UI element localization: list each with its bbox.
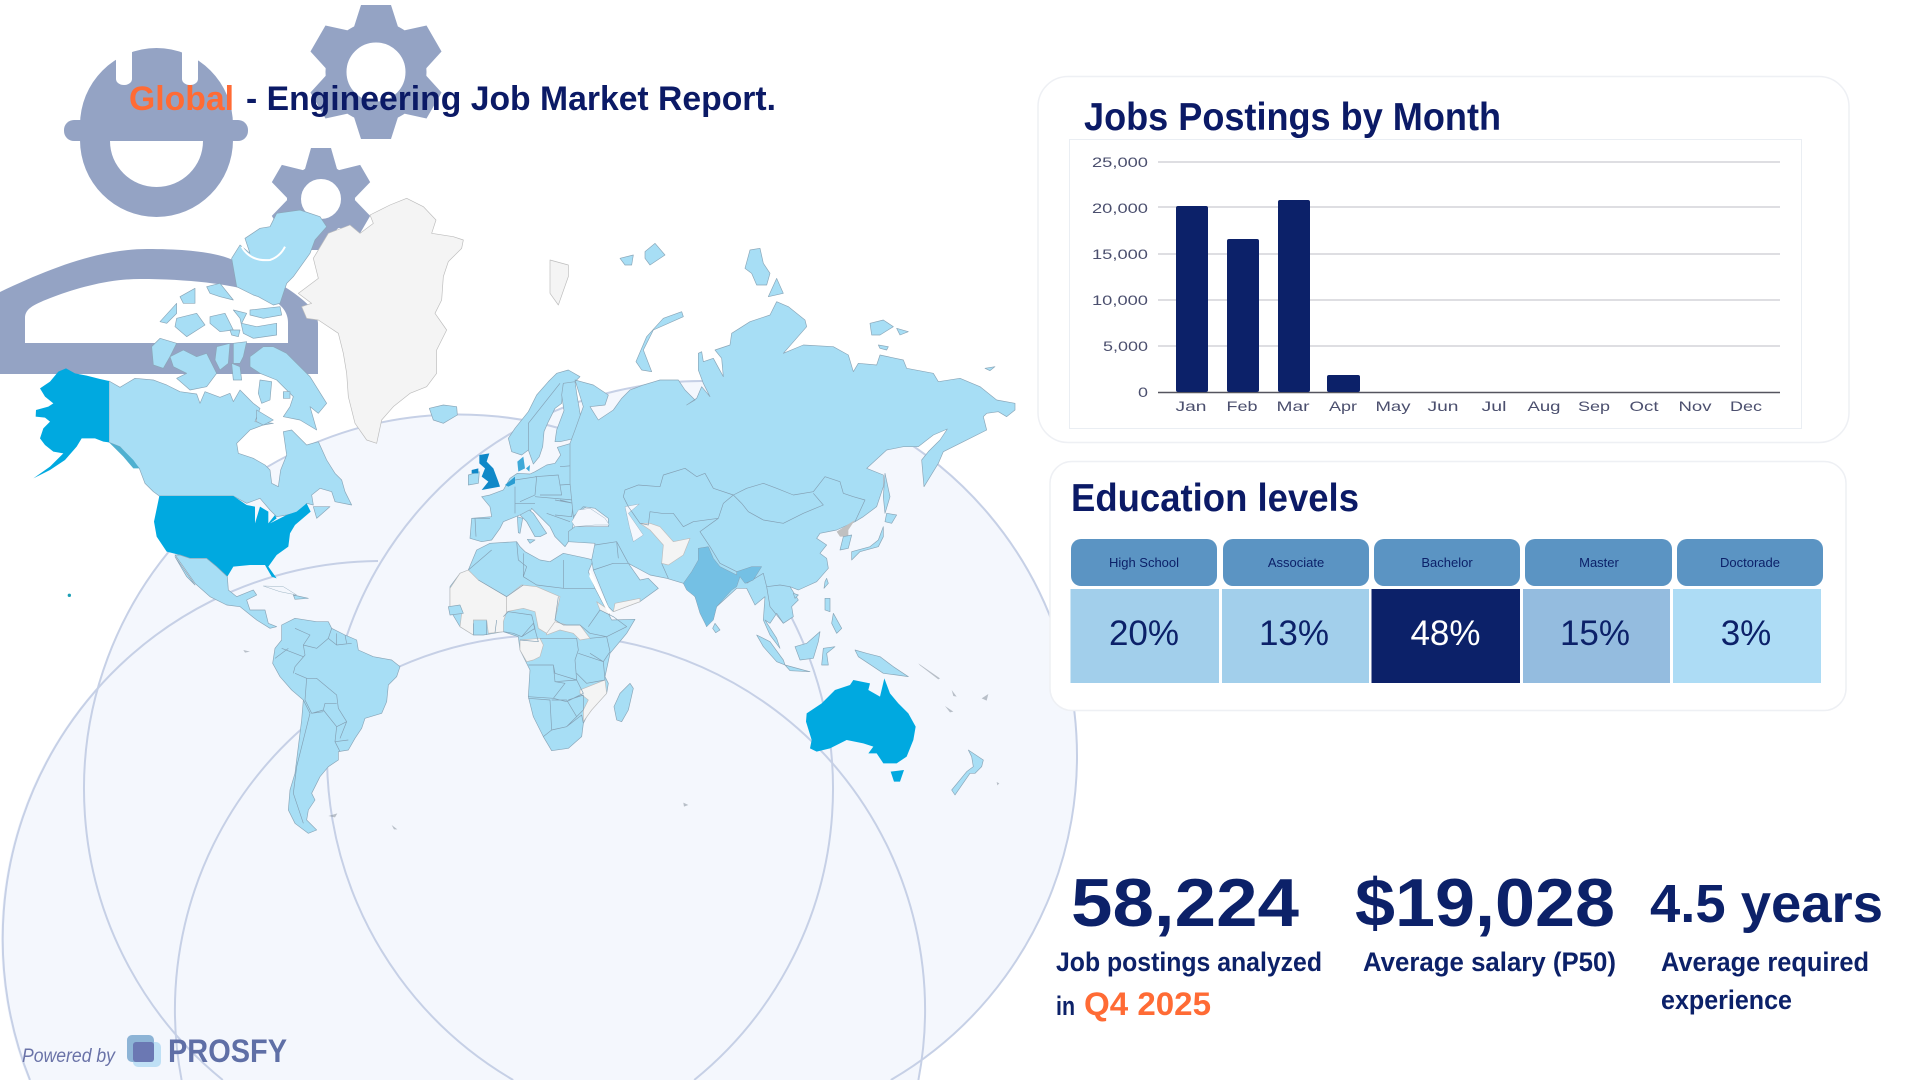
Finland [555,382,582,442]
table headers: Master [1579,555,1620,570]
stat: average required experience: experience [1661,985,1792,1015]
United States [154,496,311,578]
Nansen Sound [242,247,285,260]
Italy [520,510,547,537]
Africa countries without data [450,570,610,722]
Caspian Sea [625,504,643,542]
table headers: Doctorade [1720,555,1780,570]
Hawaii [68,594,71,597]
map: Oceania [806,663,999,795]
Cuba [263,586,297,595]
Greenland [298,198,463,443]
bar chart: Mar [1276,398,1310,414]
stat: average salary: $19,028 [1355,865,1615,941]
Senegal [448,605,463,615]
bar chart: Apr [1329,398,1357,414]
table headers [1071,539,1823,586]
logo mark [127,1035,161,1067]
main title [129,80,776,118]
Denmark [517,457,530,472]
table values [1070,589,1821,683]
India [683,547,762,627]
Yemen [613,598,640,612]
Madagascar [614,683,633,722]
bar chart: Oct [1630,398,1659,414]
stat: average salary [1355,865,1616,977]
bar chart: Aug [1528,398,1560,414]
stat: job postings analyzed: Job postings analyzed [1056,947,1322,977]
panel: jobs postings by month [1038,76,1849,442]
table values: 3% [1721,614,1771,653]
Russia and Asia landmass [568,302,1015,648]
Italy islands [517,517,535,543]
map: Africa and Europe [448,370,635,751]
bar chart: 5,000 [1103,338,1148,354]
map: North America [33,198,463,628]
table headers: Bachelor [1421,555,1473,570]
Falklands and small islands [243,650,688,829]
bar chart: Nov [1678,398,1712,414]
panel: education levels [1050,462,1846,710]
Canadian arctic islands [152,210,457,518]
powered by Prosfy logo: Powered by [22,1046,116,1067]
table values: 20% [1109,614,1179,653]
panel heading: Jobs Postings by Month [1084,96,1501,139]
panel heading: Education levels [1071,477,1359,520]
stat: job postings analyzed: Q4 2025 [1084,986,1211,1022]
Mexico and Central America [175,555,277,628]
Tasmania [891,770,904,782]
United Kingdom [472,453,500,490]
map: Asia [550,243,1015,677]
bar chart: 0 [1138,384,1148,400]
bar chart: Jul [1482,398,1506,414]
bar chart: Jan [1176,398,1206,414]
South America borders [275,628,352,823]
bar chart: Feb [1226,398,1258,414]
table values: 48% [1410,614,1481,653]
Pacific island chains [918,663,999,785]
bar chart: May [1376,398,1410,414]
Arctic and Pacific islands [620,243,995,677]
stat: job postings analyzed: 58,224 [1071,865,1299,941]
chart frame [1070,140,1802,428]
icon: large gear [306,5,446,139]
Continental Europe [470,440,607,547]
Europe borders [472,383,605,537]
Baja California [175,557,195,585]
icon: engineer with hard hat [0,38,318,374]
table values: 13% [1259,614,1329,653]
Turkmenistan and Afghanistan [640,523,690,565]
stat: average salary: Average salary (P50) [1363,947,1616,977]
table headers: Associate [1268,555,1324,570]
Asia borders [593,468,865,623]
stat: job postings analyzed: in [1056,991,1075,1021]
bar chart: Dec [1730,398,1762,414]
background circles [1,381,1077,1080]
title remainder: - Engineering Job Market Report. [246,80,776,118]
bar chart: 25,000 [1092,154,1148,170]
South America landmass [273,618,400,833]
table headers: High School [1109,555,1179,570]
Red Sea gap [589,570,612,613]
Netherlands [505,477,515,487]
Norway and Sweden [508,370,580,464]
stat: average required experience: 4.5 years [1650,874,1883,934]
bar chart: Jun [1428,398,1458,414]
Canada mainland [109,378,352,517]
world map [33,198,1015,833]
Hispaniola [293,595,308,599]
Svalbard [550,260,568,305]
icon: small gear [269,148,373,250]
Alaska panhandle [109,442,139,468]
table values: 15% [1560,614,1630,653]
Africa landmass [450,542,635,751]
title word: Global: Global [129,80,234,118]
stat: average required experience: Average required [1661,947,1869,977]
bar chart: 15,000 [1092,246,1148,262]
map: South America [243,618,688,833]
stat: job postings analyzed [1056,865,1322,1022]
bar chart: Sep [1578,398,1610,414]
Africa borders [468,542,627,737]
Australia [806,678,916,763]
North Korea [837,520,855,537]
stat: average required experience [1650,874,1883,1015]
bar chart [1092,154,1780,414]
bar chart: 20,000 [1092,200,1148,216]
powered by Prosfy logo [22,1033,287,1069]
powered by Prosfy logo: PROSFY [168,1033,287,1069]
Black Sea [572,508,609,527]
Ireland [468,472,479,485]
Alaska [33,368,109,478]
New Zealand [952,750,983,795]
bar chart: 10,000 [1092,292,1148,308]
